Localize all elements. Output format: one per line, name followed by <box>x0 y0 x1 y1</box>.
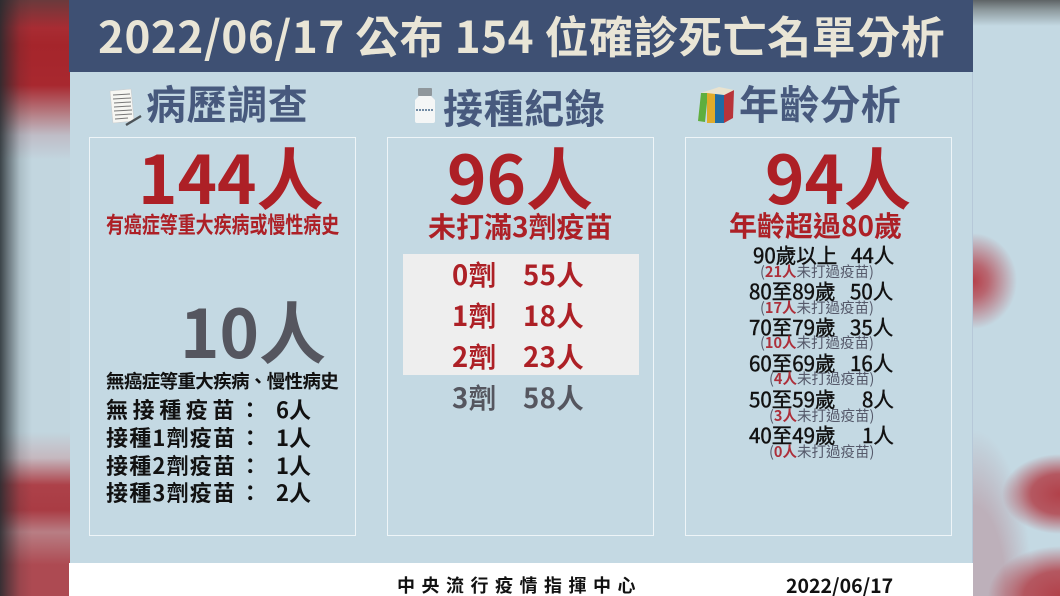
panel: vaccination record <box>387 137 654 536</box>
heading: age analysis: 年齡分析 <box>739 73 901 131</box>
footer bar <box>69 563 973 596</box>
list: vaccination of the 10: 1人 <box>276 421 311 453</box>
stat: 94 people: 94人 <box>765 127 911 224</box>
dose row 3: 3劑 <box>452 376 497 416</box>
list: age groups: (21人未打過疫苗) <box>760 261 874 282</box>
age 50-59: 50至59歲 <box>749 383 836 413</box>
text: 23人 <box>523 335 584 375</box>
icon: books <box>698 87 734 123</box>
icon: medical record paper and pen <box>110 88 142 126</box>
title banner <box>69 0 973 72</box>
icon: vaccine vial <box>415 88 435 123</box>
blurred background left <box>0 0 70 596</box>
list: vaccination of the 10: 6人 <box>276 393 311 425</box>
list row: three doses: 接種3劑疫苗： <box>106 476 262 508</box>
stat: 144 people: 144人 <box>138 127 324 224</box>
age 70-79: 70至79歲 <box>749 311 836 341</box>
text: 58人 <box>523 376 584 416</box>
list: vaccination of the 10: 1人 <box>276 449 311 481</box>
list: age groups: 16人 <box>850 347 893 377</box>
list: age groups <box>749 239 894 462</box>
heading: vaccination record: 接種紀錄 <box>443 77 605 135</box>
list: age groups: (17人未打過疫苗) <box>760 297 874 318</box>
age 40-49: 40至49歲 <box>749 419 836 449</box>
text: 96 description: 未打滿3劑疫苗 <box>428 206 613 246</box>
list row: two doses: 接種2劑疫苗： <box>106 449 262 481</box>
title: 2022/06/17 公布 154 位確診死亡名單分析 <box>98 2 945 66</box>
stat: 10 people: 10人 <box>180 281 326 378</box>
list: age groups: 8人 <box>862 383 894 413</box>
panel: age analysis <box>685 137 952 536</box>
text: 10 description: 無癌症等重大疾病、慢性病史 <box>106 368 338 394</box>
blurred background right <box>973 0 1060 596</box>
age 90+: 90歲以上 <box>753 239 837 269</box>
panel: medical history <box>89 137 356 536</box>
list: age groups: (3人未打過疫苗) <box>769 405 874 426</box>
list: age groups: (10人未打過疫苗) <box>760 332 874 353</box>
list: vaccination of the 10: 2人 <box>276 476 311 508</box>
text: 144 description: 有癌症等重大疾病或慢性病史 <box>106 208 339 240</box>
list: age groups: 1人 <box>862 419 894 449</box>
age 60-69: 60至69歲 <box>749 347 836 377</box>
dose row 0: 0劑 <box>452 253 497 293</box>
age 80-89: 80至89歲 <box>749 275 836 305</box>
text: 18人 <box>523 294 584 334</box>
text: 55人 <box>523 253 584 293</box>
text: 94 description: 年齡超過80歲 <box>729 205 902 245</box>
stat: 96 people: 96人 <box>447 127 593 224</box>
list: age groups: 44人 <box>851 239 894 269</box>
list: age groups: 35人 <box>850 311 893 341</box>
list: vaccination of the 10 <box>106 393 311 508</box>
list: age groups: (0人未打過疫苗) <box>769 441 874 462</box>
list row: none: 無接種疫苗： <box>106 393 266 425</box>
list: age groups: 50人 <box>850 275 893 305</box>
list: age groups: (4人未打過疫苗) <box>769 368 874 389</box>
list row: one dose: 接種1劑疫苗： <box>106 421 262 453</box>
heading: medical history: 病歷調查 <box>146 73 308 131</box>
highlight: under three doses <box>403 254 639 375</box>
dose row 2: 2劑 <box>452 335 497 375</box>
dose row 1: 1劑 <box>452 294 497 334</box>
